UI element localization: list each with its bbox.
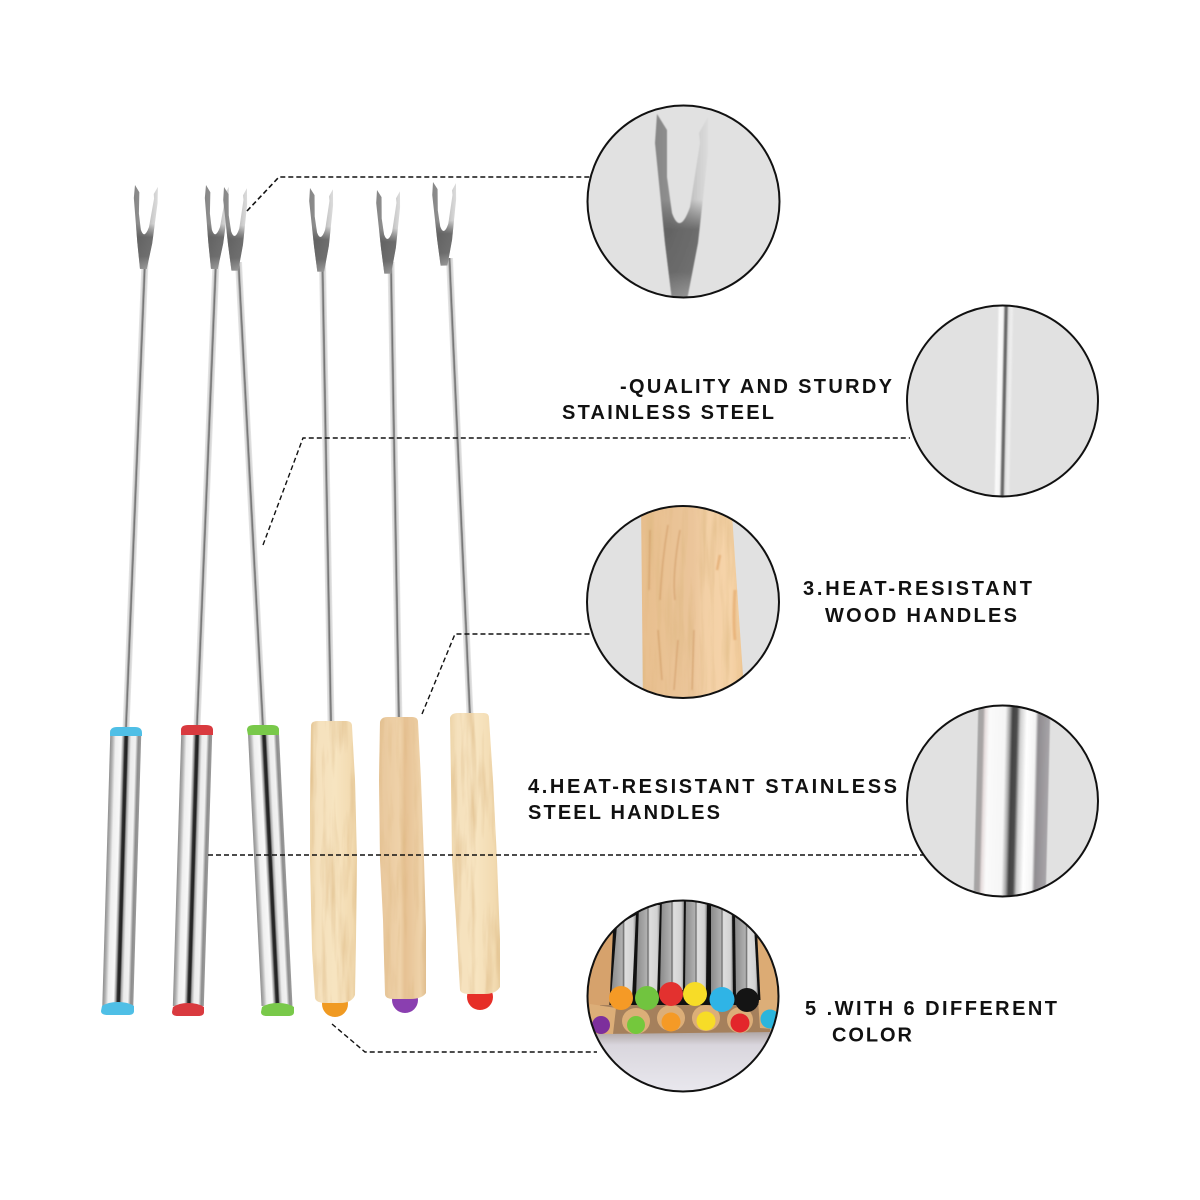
dashed leader: steel shaft (263, 438, 910, 545)
wood shadow band (600, 1005, 770, 1034)
text: steel handles (528, 776, 897, 824)
text: wood handles: 3.HEAT-RESISTANT (803, 578, 1032, 600)
red caps (172, 725, 213, 1016)
text: quality and sturdy steel (562, 376, 893, 424)
text: quality and sturdy steel: STAINLESS STEEL (562, 402, 774, 424)
text: steel handles: 4.HEAT-RESISTANT STAINLESS (528, 776, 897, 798)
dashed leader: steel handle (208, 854, 925, 856)
fork 3: green steel handle (223, 187, 294, 1016)
text: wood handles: WOOD HANDLES (825, 605, 1017, 627)
fork 5: purple wood handle (376, 190, 426, 1013)
text: steel handles: STEEL HANDLES (528, 802, 720, 824)
text: six colours (805, 998, 1057, 1046)
floor (596, 1030, 771, 1058)
dashed leader: wood handle (422, 634, 590, 714)
fork 6: red wood handle (432, 182, 500, 1010)
text: six colours: 5 .WITH 6 DIFFERENT (805, 998, 1057, 1020)
blue caps (101, 727, 142, 1015)
colored balls (592, 982, 780, 1034)
forks group (101, 182, 500, 1017)
red tip (467, 984, 493, 1010)
dark gaps (609, 902, 760, 1005)
orange tip (322, 991, 348, 1017)
text: six colours: COLOR (832, 1024, 913, 1046)
text: wood handles (803, 578, 1032, 627)
circle: stainless shaft detail (907, 302, 1098, 502)
darker wood handle (379, 717, 426, 999)
dashed leader: colour tips (332, 1024, 597, 1052)
circle: fork tip detail (588, 106, 780, 300)
circle: wood handle detail (587, 500, 779, 705)
outer wood pieces (588, 932, 613, 1010)
green caps (247, 725, 294, 1016)
purple tip (392, 987, 418, 1013)
fork 1: blue steel handle (101, 185, 158, 1015)
steel rods (611, 895, 758, 998)
pale wood handle (310, 721, 357, 1003)
fork 4: orange wood handle (309, 188, 357, 1017)
fork 2: red steel handle (172, 185, 229, 1016)
wood row (588, 1000, 785, 1034)
dashed leader: fork tip (247, 177, 592, 211)
pale wood handle (450, 713, 500, 994)
text: quality and sturdy steel: -QUALITY AND STURDY (620, 376, 893, 398)
circle: six colour tips detail (585, 895, 785, 1098)
circle: steel handle detail (907, 701, 1098, 903)
